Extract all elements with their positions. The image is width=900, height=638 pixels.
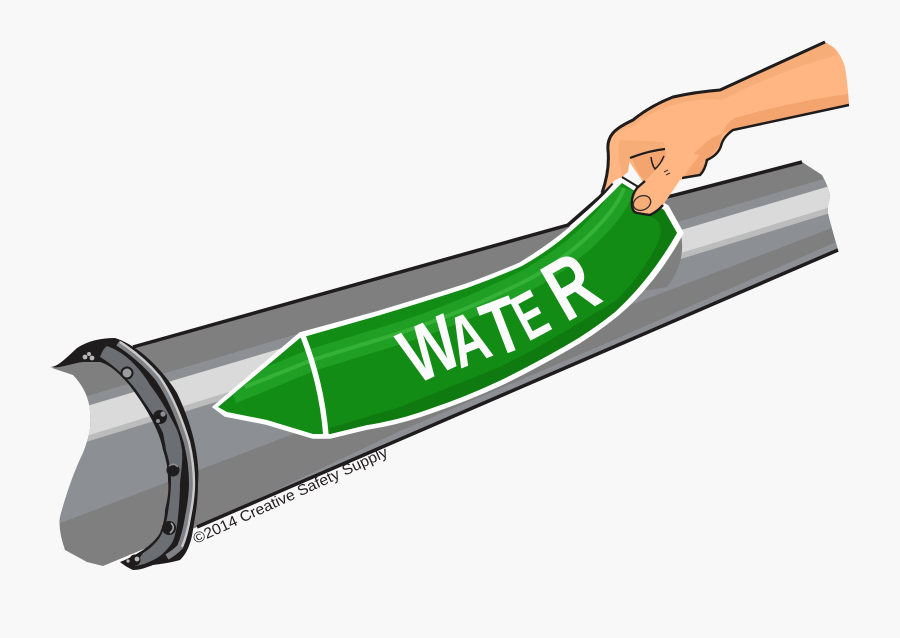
bright stripe xyxy=(245,188,624,387)
lighter band xyxy=(232,188,624,393)
WATER label: A xyxy=(436,295,501,384)
lower edge strip xyxy=(255,238,845,508)
bolt xyxy=(122,368,132,378)
flange outer ring xyxy=(118,343,192,557)
bolt xyxy=(162,521,176,535)
sticker green xyxy=(218,183,677,434)
thumb xyxy=(632,150,700,215)
bolt xyxy=(166,464,180,476)
WATER label xyxy=(386,233,614,400)
copyright text: ©2014 Creative Safety Supply xyxy=(191,444,391,548)
lower finger xyxy=(682,162,707,178)
thumb outline xyxy=(632,181,663,215)
pipe marker sticker xyxy=(212,183,684,439)
pipe xyxy=(50,162,845,566)
arm shading xyxy=(613,42,838,133)
thumb creases xyxy=(664,170,670,175)
finger line xyxy=(630,149,665,158)
pipe top outline xyxy=(133,162,802,347)
sticker corner line xyxy=(622,177,640,188)
bolt xyxy=(126,554,140,566)
finger crease xyxy=(651,156,664,169)
pipe bottom outline xyxy=(197,250,838,527)
WATER label: T xyxy=(470,280,534,374)
dark lower band xyxy=(330,208,677,434)
flange xyxy=(50,338,198,570)
index finger shade xyxy=(618,140,665,175)
hand and arm shape xyxy=(602,42,849,193)
bolt cluster xyxy=(83,352,94,360)
pipe body xyxy=(52,162,838,566)
sticker white border xyxy=(213,178,683,438)
flange bolts xyxy=(83,352,180,566)
infographic illustration xyxy=(50,40,850,570)
shadow right of sticker xyxy=(644,237,682,291)
flange light ring xyxy=(120,342,194,547)
WATER label: R xyxy=(527,233,614,339)
thumbnail xyxy=(631,193,653,213)
flange grey face xyxy=(100,346,182,566)
hand xyxy=(602,42,849,215)
bolt xyxy=(153,410,167,424)
WATER label: E xyxy=(500,275,560,355)
pipe shading bands xyxy=(50,174,845,527)
middle finger xyxy=(632,150,666,181)
WATER label: W xyxy=(386,298,473,400)
hand outline xyxy=(602,42,825,193)
flange black silhouette xyxy=(50,338,198,570)
sticker divider xyxy=(303,336,326,436)
